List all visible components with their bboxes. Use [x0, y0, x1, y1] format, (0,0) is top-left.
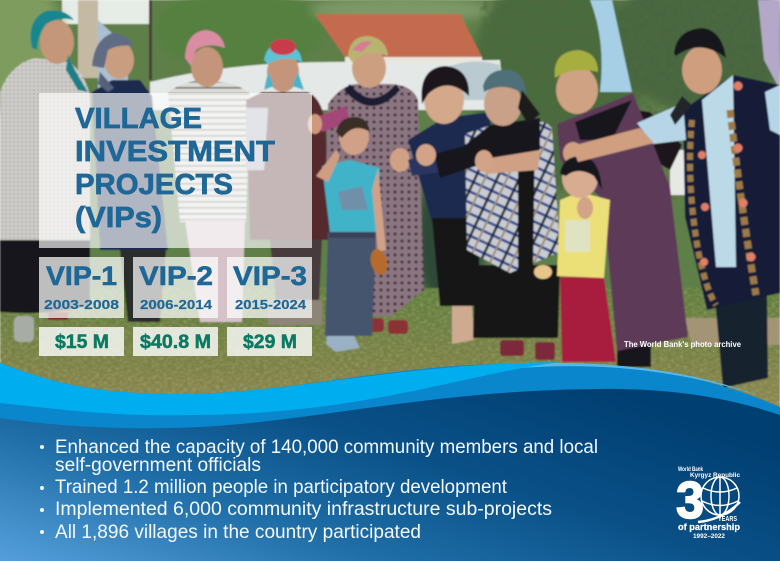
person 1: woman in teal scarf [0, 10, 90, 342]
title: PROJECTS [75, 169, 233, 201]
key results bullet list [40, 436, 598, 543]
panel: VIP-2 [133, 257, 218, 318]
amount: VIP-1: $15 M [55, 332, 109, 353]
photo background: sky, trees and buildings [0, 0, 780, 310]
amount: VIP-2: $40.8 M [140, 332, 211, 353]
person 5: woman in flowered scarf with patterned dress [308, 36, 424, 334]
key results bullet list: Implemented 6,000 community infrastructure sub-projects [55, 498, 552, 520]
title panel [39, 93, 312, 248]
person 7: woman in navy top [390, 66, 495, 344]
photo ground: grass [0, 287, 780, 407]
logo: World Bank 30 years of partnership [676, 467, 741, 540]
logo: World Bank 30 years of partnership: of partnership [678, 522, 741, 532]
amount: VIP-3 [227, 327, 312, 356]
title [75, 103, 275, 234]
panel: VIP-3 [227, 257, 312, 318]
panel: VIP-2: 2006-2014 [140, 297, 213, 312]
person 4: woman in teal and red hat [246, 39, 330, 325]
logo: World Bank 30 years of partnership: YEARS [718, 516, 737, 523]
amount: VIP-1 [39, 327, 124, 356]
photo credit: The World Bank's photo archive [624, 340, 742, 349]
icon: globe [698, 477, 740, 522]
person 11: woman in embroidered navy vest [572, 28, 780, 388]
panel: VIP-3: 2015-2024 [235, 297, 307, 312]
person 8: elderly woman in blue and white plaid [416, 70, 560, 360]
key results bullet list: All 1,896 villages in the country participated [55, 521, 421, 543]
person 9: woman in green scarf and purple dress [555, 50, 688, 367]
icon: large numeral 3: 3 [676, 472, 704, 530]
person 2: woman in striped scarf [92, 33, 168, 322]
key results bullet list: Enhanced the capacity of 140,000 community members and local [55, 436, 598, 458]
title: VILLAGE [75, 103, 202, 135]
person 10: girl in yellow shirt [534, 156, 616, 362]
panel: VIP-1: 2003-2008 [44, 297, 119, 312]
panel: VIP-1: VIP-1 [46, 261, 117, 291]
logo: World Bank 30 years of partnership: 1992–2022 [693, 534, 726, 540]
amount: VIP-3: $29 M [243, 332, 297, 353]
panel: VIP-2: VIP-2 [139, 261, 213, 291]
person 6: boy in teal shirt [316, 117, 390, 352]
amount: VIP-2 [133, 327, 218, 356]
panel: VIP-3: VIP-3 [233, 261, 307, 291]
blue wave footer [0, 362, 780, 561]
title: (VIPs) [75, 202, 162, 234]
title: INVESTMENT [75, 136, 275, 168]
panel: VIP-1 [39, 257, 124, 318]
key results bullet list: Trained 1.2 million people in participatory development [55, 476, 508, 498]
person 3: woman in pink scarf [168, 30, 250, 322]
photo: villagers giving thumbs up [0, 0, 780, 430]
key results bullet list: self-government officials [55, 454, 261, 476]
logo: World Bank 30 years of partnership: World Bank [678, 467, 703, 473]
logo: World Bank 30 years of partnership: Kyrgyz Republic [690, 473, 741, 479]
